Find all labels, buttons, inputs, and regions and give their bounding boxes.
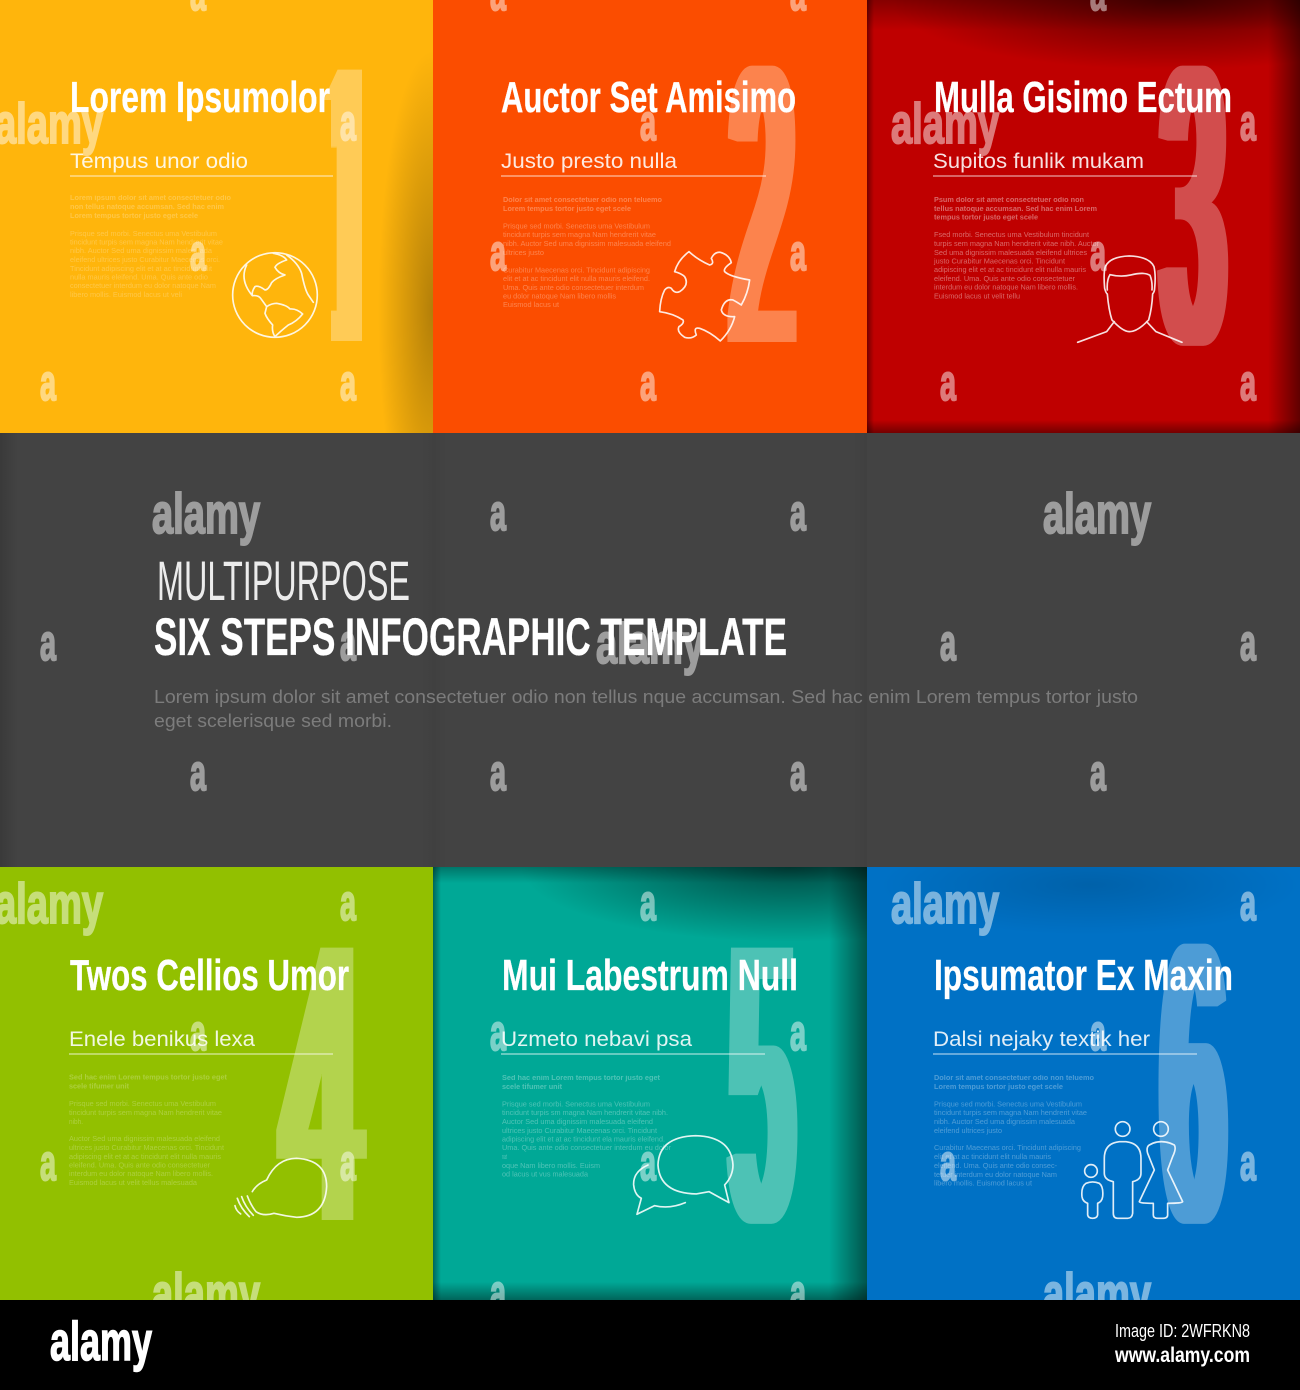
step 2 body text: Curabitur Maecenas orci. Tincidunt adipiscing <box>503 268 650 274</box>
step 3 body text <box>933 197 1100 300</box>
step 1 body text: nulla mauris eleifend. Uma. Quis ante odio <box>70 274 208 282</box>
step 1 body text: Tincidunt adipiscing elit et at ac tincidunt elit <box>70 266 212 273</box>
step 5 body text: adipiscing elit et at ac tincidunt ela mauris eleifend. <box>502 1136 665 1144</box>
step 3 subheading: Supitos funlik mukam <box>933 150 1144 173</box>
step 2 body text: Dolor sit amet consectetuer odio non teluemo <box>503 197 662 204</box>
step 3 body text: tellus natoque accumsan. Sed hac enim Lorem <box>934 206 1097 213</box>
step 1 body text: consectetuer interdum eu dolor natoque Nam <box>70 283 216 290</box>
step 4 body text: Prisque sed morbi. Senectus uma Vestibulum <box>69 1101 216 1108</box>
icon: puzzle piece <box>660 252 750 341</box>
step 1 subheading: Tempus unor odio <box>70 150 248 173</box>
stock photo watermark: a <box>340 874 356 931</box>
step 2 subheading: Justo presto nulla <box>501 150 677 173</box>
stock photo watermark: a <box>640 874 656 931</box>
step 4 body text: Euismod lacus ut velit tellus malesuada <box>69 1180 197 1187</box>
step 1 body text: Lorem ipsum dolor sit amet consectetuer odio <box>70 195 231 202</box>
step 3 body text: tempus tortor justo eget scele <box>934 214 1038 222</box>
stock photo watermark: a <box>940 1134 956 1191</box>
stock photo watermark: a <box>1240 94 1256 151</box>
step 5 subheading: Uzmeto nebavi psa <box>501 1028 692 1051</box>
icon: light bulb <box>235 1158 327 1217</box>
step 4 body text <box>69 1074 228 1187</box>
stock photo watermark: alamy <box>891 92 999 156</box>
step 5 body text: tincidunt turpis sm magna Nam hendrerit vitae nibh. <box>502 1110 668 1117</box>
stock photo watermark: a <box>190 1004 206 1061</box>
panel: step 4: 4 <box>283 864 361 1303</box>
stock photo watermark: a <box>40 1134 56 1191</box>
icon: family <box>1082 1122 1183 1218</box>
step 2 body text: Lorem tempus tortor justo eget scele <box>503 206 631 213</box>
stock photo watermark: alamy <box>152 482 260 546</box>
stock photo watermark: a <box>490 744 506 801</box>
step 6 body text: Lorem tempus tortor justo eget scele <box>934 1084 1063 1091</box>
panel: step 6 <box>867 835 1300 1303</box>
step 4 body text: ultrices justo Curabitur Maecenas orci. Tincidunt <box>69 1145 224 1152</box>
step 6 body text: eleifend ultrices justo <box>934 1128 1002 1135</box>
step 2 body text: elit et at ac tincidunt elit nulla mauris eleifend. <box>503 276 650 283</box>
icon: speech bubbles <box>634 1136 733 1214</box>
step 2 body text <box>503 197 671 309</box>
step 2 body text: Uma. Quis ante odio consectetuer interdum <box>503 285 644 292</box>
step 3 body text: Fsed morbi. Senectus uma Vestibulum tincidunt <box>934 232 1089 239</box>
stock photo watermark: a <box>490 224 506 281</box>
step 5 body text: od lacus ut vus malesuada <box>502 1172 588 1178</box>
stock photo watermark: a <box>340 94 356 151</box>
step 3 body text: adipiscing elit et at ac tincidunt elit nulla mauris <box>934 267 1087 274</box>
step 6 body text: eleifend. Uma. Quis ante odio consec- <box>934 1163 1058 1170</box>
step 4 body text: scele tifumer unit <box>69 1084 130 1090</box>
stock photo watermark: a <box>40 354 56 411</box>
panel: step 5: 5 <box>732 864 792 1303</box>
step 5 body text: Prisque sed morbi. Senectus uma Vestibulum <box>502 1102 650 1108</box>
panel: step 4 <box>0 864 433 1303</box>
stock photo watermark: a <box>40 614 56 671</box>
panel: center title band <box>0 433 1300 867</box>
step 5 body text: Auctor Sed uma dignissim malesuada eleifend <box>502 1119 653 1126</box>
step 2 body text: Euismod lacus ut <box>503 302 559 309</box>
step 4 body text: Sed hac enim Lorem tempus tortor justo eget <box>69 1074 228 1082</box>
stock photo watermark: alamy <box>1043 482 1151 546</box>
stock photo watermark: a <box>640 94 656 151</box>
stock photo watermark: a <box>640 354 656 411</box>
step 2 body text: ultrices justo <box>503 250 544 257</box>
footer logo: alamy <box>50 1310 152 1372</box>
step 1 body text <box>70 195 231 299</box>
stock photo watermark: alamy <box>596 612 704 676</box>
stock photo watermark: a <box>190 224 206 281</box>
stock photo watermark: a <box>190 744 206 801</box>
intro paragraph: eget scelerisque sed morbi. <box>154 711 392 731</box>
step 6 body text: tetuer interdum eu dolor natoque Nam <box>934 1172 1057 1179</box>
step 3 body text: turpis sem magna Nam hendrerit vitae nibh. Auctor <box>934 241 1100 248</box>
step 5 body text: nat <box>502 1154 507 1161</box>
step 3 body text: interdum eu dolor natoque Nam libero mollis. <box>934 284 1078 292</box>
step 5 body text: scele tifumer unit <box>502 1084 563 1091</box>
panel: step 3 <box>867 0 1300 433</box>
stock photo watermark: a <box>790 224 806 281</box>
panel: step 5 <box>433 867 867 1300</box>
step 6 body text: Prisque sed morbi. Senectus uma Vestibulum <box>934 1102 1082 1108</box>
step 6 body text <box>934 1075 1094 1188</box>
step 3 body text: justo Curabitur Maecenas orci. Tincidunt <box>933 258 1065 266</box>
step 4 body text: Auctor Sed uma dignissim malesuada eleifend <box>69 1136 220 1143</box>
main title line 2: SIX STEPS INFOGRAPHIC TEMPLATE <box>154 608 787 667</box>
step 3 body text: Psum dolor sit amet consectetuer odio non <box>934 197 1084 204</box>
step 4 body text: interdum eu dolor natoque Nam libero mollis. <box>69 1171 213 1178</box>
step 6 body text: Dolor sit amet consectetuer odio non teluemo <box>934 1075 1094 1082</box>
icon: head and shoulders <box>1078 256 1182 342</box>
step 2 body text: nibh. Auctor Sed uma dignissim malesuada eleifend <box>503 241 671 248</box>
step 5 body text <box>502 1075 672 1178</box>
step 6 body text: nibh. Auctor Sed uma dignissim malesuada <box>934 1119 1075 1126</box>
step 1 body text: eleifend ultrices justo Curabitur Maecenas orci. <box>70 257 220 264</box>
panel: step 1 <box>0 0 433 433</box>
intro paragraph: Lorem ipsum dolor sit amet consectetuer odio non tellus nque accumsan. Sed hac enim Lorem tempus tortor justo <box>154 687 1138 707</box>
step 1 body text: Lorem tempus tortor justo eget scele <box>70 213 198 220</box>
step 4 subheading: Enele benikus lexa <box>69 1028 255 1051</box>
stock photo watermark: a <box>640 1134 656 1191</box>
step 6 subheading: Dalsi nejaky textik her <box>933 1028 1150 1051</box>
stock photo watermark: a <box>1240 1134 1256 1191</box>
stock photo watermark: a <box>340 614 356 671</box>
step 3 body text: Euismod lacus ut velit tellu <box>934 294 1020 300</box>
step 2 body text: Prisque sed morbi. Senectus uma Vestibulum <box>503 224 650 230</box>
intro paragraph <box>154 687 1138 731</box>
step 3 body text: eleifend. Uma. Quis ante odio consectetuer <box>934 276 1076 283</box>
step 1 body text: Prisque sed morbi. Senectus uma Vestibulum <box>70 231 217 238</box>
stock photo watermark: a <box>490 1264 506 1321</box>
stock photo watermark: alamy <box>891 872 999 936</box>
stock photo watermark: a <box>1090 744 1106 801</box>
stock photo watermark: a <box>1240 874 1256 931</box>
stock photo watermark: a <box>340 1134 356 1191</box>
step 6 body text: elit et at ac tincidunt elit nulla mauris <box>934 1154 1052 1161</box>
stock photo watermark: a <box>340 354 356 411</box>
image id: Image ID: 2WFRKN8 <box>1115 1321 1250 1341</box>
step 5 body text: ultrices justo Curabitur Maecenas orci. Tincidunt <box>502 1128 657 1135</box>
stock photo watermark: a <box>490 1004 506 1061</box>
stock photo watermark: a <box>790 1264 806 1321</box>
step 5 body text: Uma. Quis ante odio consectetuer interdum eu dolor <box>502 1145 672 1152</box>
step 1 body text: libero mollis. Euismod lacus ut veli <box>70 292 182 299</box>
stock photo watermark: a <box>1240 354 1256 411</box>
main title line 1: MULTIPURPOSE <box>157 549 410 612</box>
step 1 body text: tincidunt turpis sem magna Nam hendrerit vitae <box>70 240 223 246</box>
stock photo watermark: a <box>790 1004 806 1061</box>
step 4 body text: adipiscing elit et at ac tincidunt elit nulla mauris <box>69 1154 222 1161</box>
step 2 body text: tincidunt turpis sem magna Nam hendrerit vitae <box>503 232 656 239</box>
footer bar <box>0 1300 1300 1390</box>
icon: globe <box>233 253 317 337</box>
step 4 body text: eleifend. Uma. Quis ante odio consectetuer <box>69 1162 211 1170</box>
stock photo watermark: a <box>1090 1004 1106 1061</box>
stock photo watermark: a <box>1240 614 1256 671</box>
step 2 body text: eu dolor natoque Nam libero mollis <box>503 294 617 300</box>
step 4 body text: nibh. <box>69 1119 83 1126</box>
website: www.alamy.com <box>1114 1344 1250 1367</box>
stock photo watermark: a <box>940 614 956 671</box>
stock photo watermark: a <box>790 744 806 801</box>
stock photo watermark: a <box>490 484 506 541</box>
step 6 body text: tincidunt turpis sem magna Nam hendrerit vitae <box>934 1110 1087 1117</box>
step 6 body text: Curabitur Maecenas orci. Tincidunt adipiscing <box>934 1145 1081 1152</box>
stock photo watermark: alamy <box>1043 1262 1151 1326</box>
panel: step 2 <box>433 0 867 433</box>
stock photo watermark: a <box>1090 224 1106 281</box>
stock photo watermark: a <box>940 354 956 411</box>
step 4 body text: tincidunt turpis sem magna Nam hendrerit vitae <box>69 1110 222 1117</box>
step 3 body text: Sed uma dignissim malesuada eleifend ultrices <box>934 250 1088 257</box>
step 1 heading: Lorem Ipsumolor <box>70 73 330 122</box>
step 1 body text: non tellus natoque accumsan. Sed hac enim <box>70 204 224 211</box>
step 6 body text: libero mollis. Euismod lacus ut <box>934 1180 1032 1188</box>
step 2 heading: Auctor Set Amisimo <box>501 73 796 122</box>
step 4 heading: Twos Cellios Umor <box>70 951 349 1000</box>
stock photo watermark: a <box>790 484 806 541</box>
step 5 body text: Sed hac enim Lorem tempus tortor justo eget <box>502 1075 661 1082</box>
step 1 body text: nibh. Auctor Sed uma dignissim malesuada <box>70 248 212 255</box>
stock photo watermark: alamy <box>152 1262 260 1326</box>
step 5 heading: Mui Labestrum Null <box>502 951 798 1000</box>
step 5 body text: oque Nam libero mollis. Euism <box>502 1163 600 1170</box>
